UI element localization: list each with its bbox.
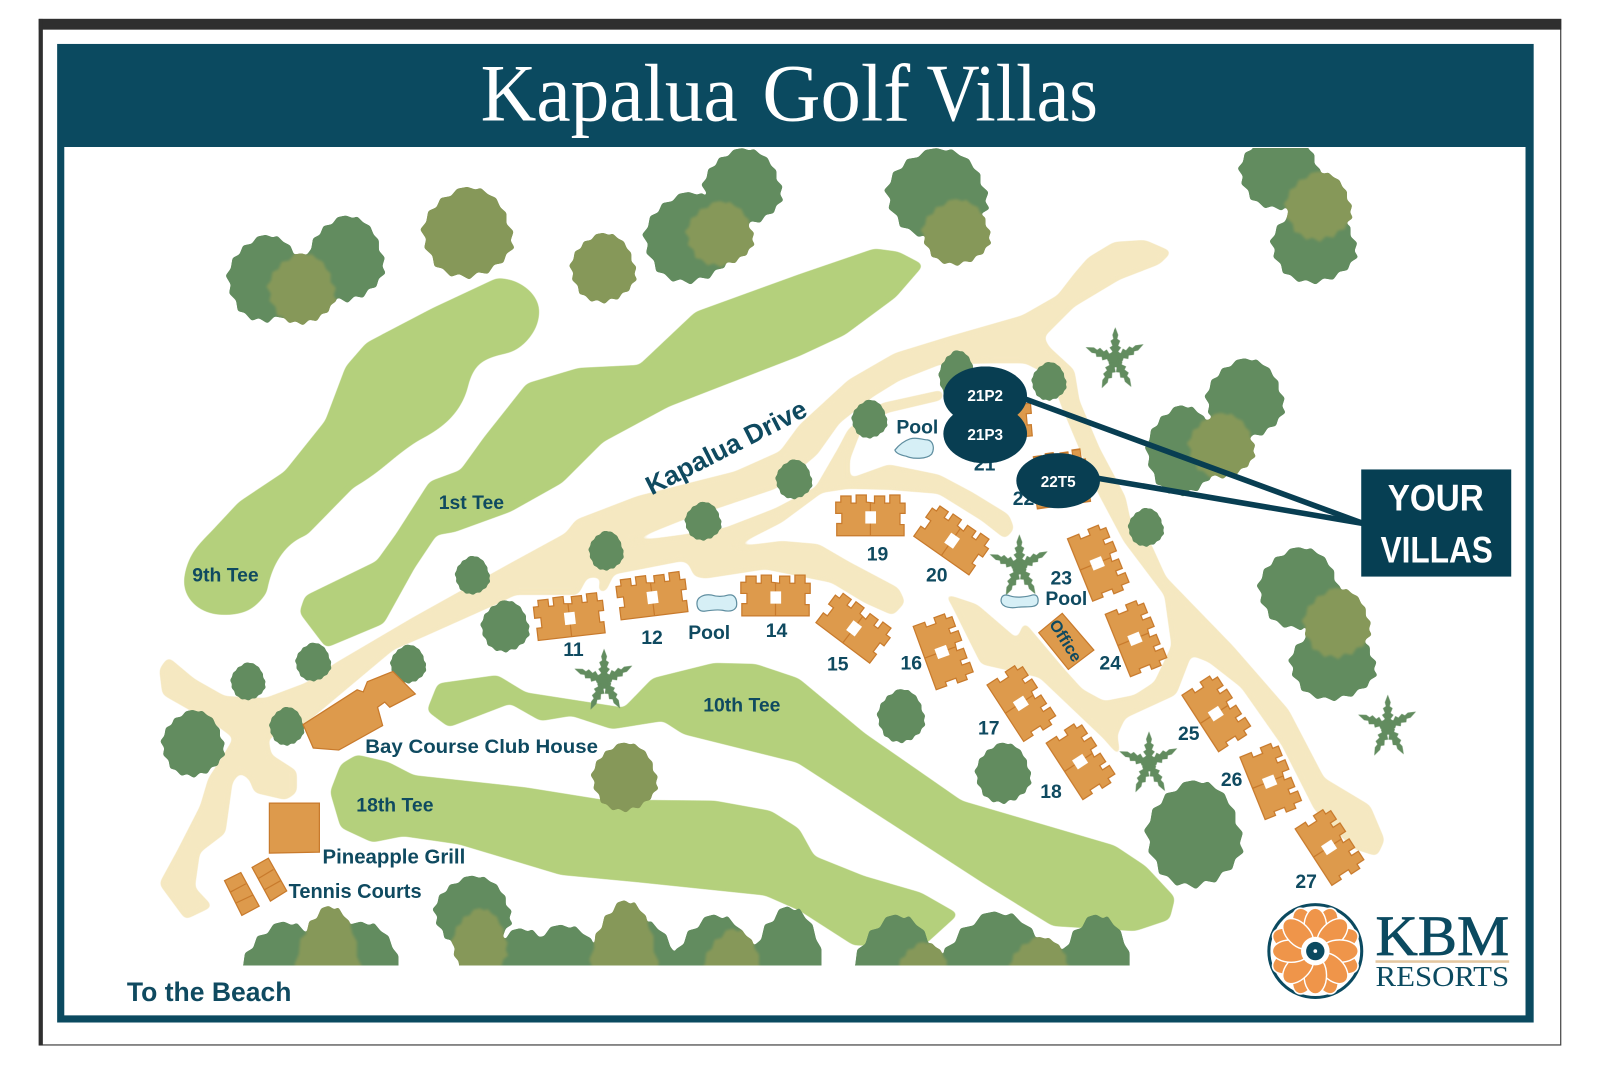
label: Bay Course Club House: Bay Course Club House xyxy=(365,736,598,758)
villa numbers: 16 xyxy=(900,652,922,674)
villa 16 xyxy=(913,612,975,691)
label: 9th Tee: 9th Tee xyxy=(192,565,259,587)
villa numbers: 17 xyxy=(978,718,1000,740)
callout: your villas: VILLAS xyxy=(1381,529,1493,570)
villa 21 xyxy=(961,395,1033,442)
villa numbers: 11 xyxy=(563,639,584,661)
villa numbers: 24 xyxy=(1099,652,1121,674)
label: 10th Tee: 10th Tee xyxy=(703,694,781,716)
title: Golf xyxy=(762,47,911,138)
callout: your villas xyxy=(1361,469,1511,577)
villa numbers: 12 xyxy=(641,627,663,649)
villa 12 xyxy=(615,571,689,620)
villa 23 xyxy=(1067,522,1131,602)
trees xyxy=(160,148,1377,966)
label: Pineapple Grill: Pineapple Grill xyxy=(322,846,465,868)
fairway: 18th hole xyxy=(332,756,956,944)
villa 25 xyxy=(1181,672,1253,753)
villa 15 xyxy=(815,589,895,664)
marker: 21P3: 21P3 xyxy=(967,427,1003,444)
villa 24 xyxy=(1105,598,1169,678)
building: office xyxy=(1039,613,1094,669)
title: Villas xyxy=(927,47,1098,138)
building: Bay Course Club House xyxy=(303,671,415,750)
villa 11 xyxy=(533,592,606,641)
villa numbers: 26 xyxy=(1221,769,1243,791)
leader lines to your villas xyxy=(1022,398,1363,524)
label: 1st Tee: 1st Tee xyxy=(439,492,504,514)
villa numbers: 14 xyxy=(766,620,788,642)
roads xyxy=(160,241,1384,918)
villa 22 xyxy=(1029,448,1091,509)
tree: olive small xyxy=(569,233,637,304)
villa numbers xyxy=(563,453,1317,893)
title: Kapalua xyxy=(481,47,738,138)
building: Pineapple Grill xyxy=(269,803,319,853)
callout: your villas: YOUR xyxy=(1388,477,1484,518)
villa numbers: 18 xyxy=(1040,781,1062,803)
tree group: top center xyxy=(642,148,784,285)
villa 27 xyxy=(1295,806,1367,886)
tree group: top middle right xyxy=(884,148,992,266)
villa numbers: 22 xyxy=(1013,488,1034,510)
tree row: bottom left xyxy=(243,906,398,966)
villa 20 xyxy=(913,502,993,575)
marker: 22T5: 22T5 xyxy=(1041,474,1076,491)
tree: olive on 18th fairway xyxy=(590,742,659,813)
tree: olive large xyxy=(420,187,515,280)
villa numbers: 15 xyxy=(827,653,849,675)
fairway: 10th hole xyxy=(429,664,1173,930)
logo: KBM Resorts: RESORTS xyxy=(1376,962,1509,993)
logo: KBM Resorts xyxy=(1269,904,1509,998)
villa 19 xyxy=(836,495,905,536)
villa numbers: 19 xyxy=(867,543,889,565)
label: To the Beach: To the Beach xyxy=(127,977,291,1007)
fairway: 1st hole xyxy=(301,250,921,646)
label: Kapalua Drive: Kapalua Drive xyxy=(641,394,812,501)
building: office: Office xyxy=(1045,617,1085,665)
fairway: 9th hole xyxy=(186,280,538,613)
marker: 22T5 xyxy=(1016,453,1100,508)
tree row: bottom right xyxy=(855,912,1130,966)
tree row: bottom center xyxy=(432,876,822,966)
label: Pool upper: Pool xyxy=(896,417,938,439)
marker: 21P3 xyxy=(943,404,1027,463)
villa numbers: 20 xyxy=(926,565,948,587)
pools xyxy=(697,438,1038,611)
villas xyxy=(533,395,1367,886)
villa numbers: 25 xyxy=(1178,723,1200,745)
tree group: upper left xyxy=(225,215,386,326)
logo emblem xyxy=(1269,904,1362,998)
logo wordmark: KBM xyxy=(1376,905,1509,968)
villa 14 xyxy=(741,575,810,616)
label: Pool right: Pool xyxy=(1045,588,1087,610)
tree group: right lower xyxy=(1256,547,1378,702)
label: Tennis Courts: Tennis Courts xyxy=(289,881,422,903)
palm trees xyxy=(572,327,1419,795)
label: Pool left: Pool xyxy=(688,622,730,644)
tree group: top right xyxy=(1238,148,1358,284)
tennis courts xyxy=(224,858,287,915)
marker: 21P2 xyxy=(943,366,1027,426)
villa 17 xyxy=(986,662,1058,742)
label: 18th Tee: 18th Tee xyxy=(356,794,434,816)
villa 18 xyxy=(1046,720,1118,800)
trees along Kapalua Drive xyxy=(160,350,1244,889)
villa numbers: 21 xyxy=(974,453,996,475)
villa 26 xyxy=(1240,741,1303,820)
villa numbers: 23 xyxy=(1050,568,1072,590)
marker: 21P2: 21P2 xyxy=(967,388,1003,405)
villa numbers: 27 xyxy=(1295,871,1317,893)
tree group: right middle xyxy=(1145,358,1286,497)
